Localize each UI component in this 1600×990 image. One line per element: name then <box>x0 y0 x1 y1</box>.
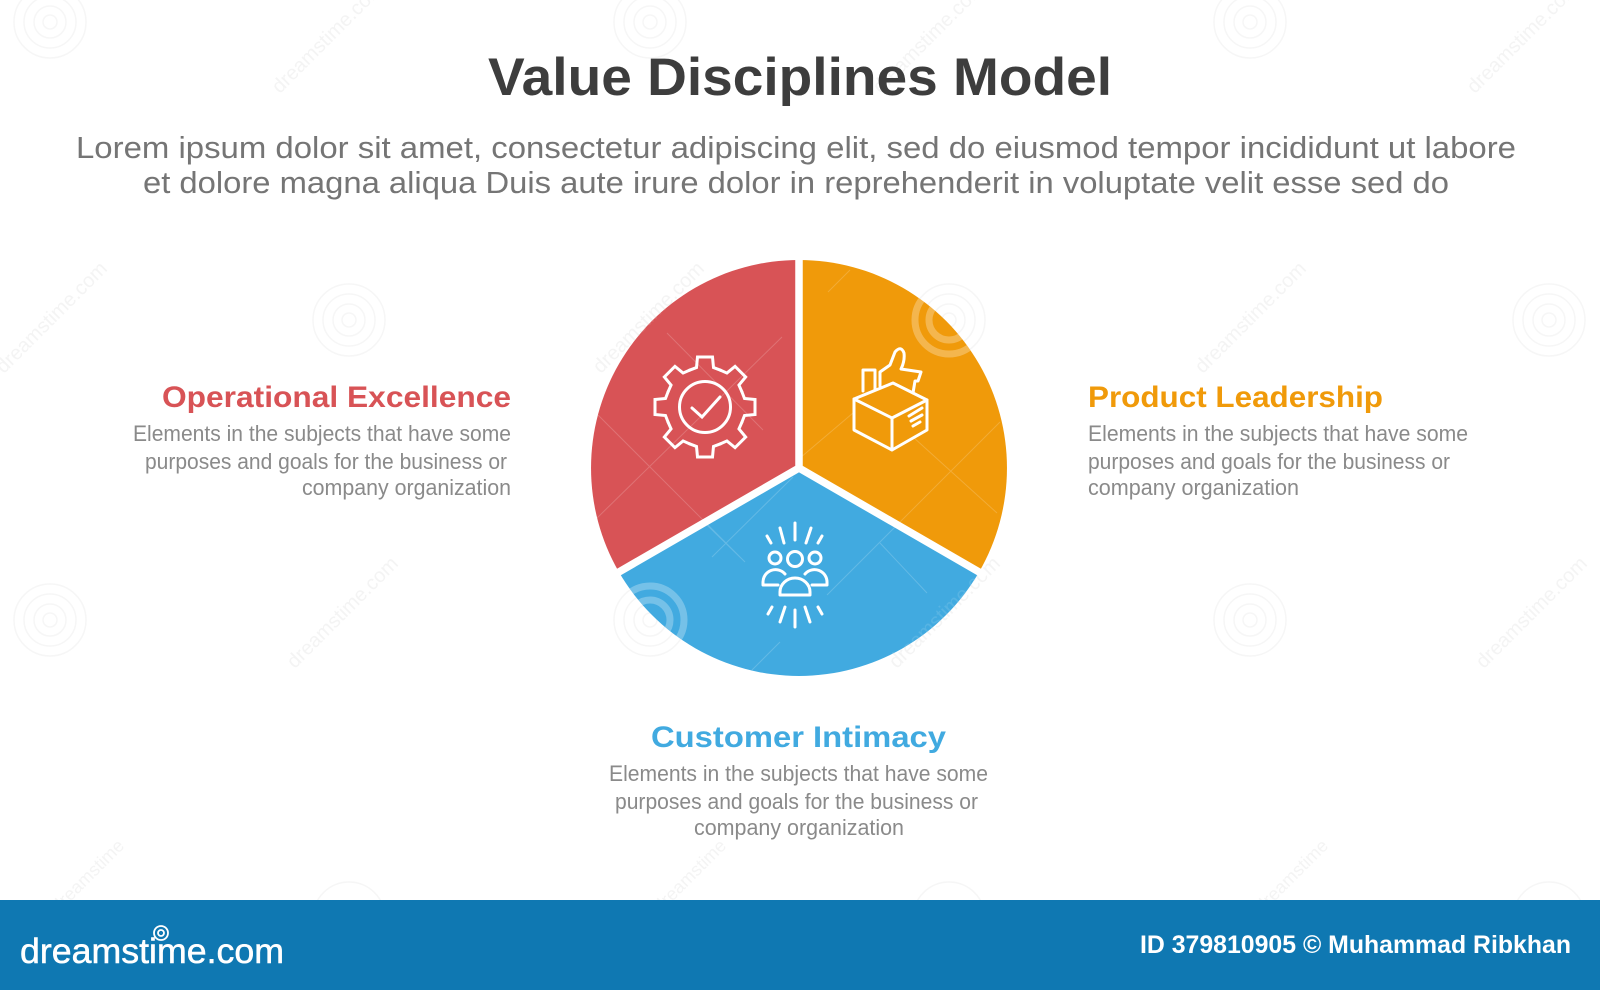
pie chart: three value disciplines: dreamstime.com <box>589 258 709 378</box>
heading: customer intimacy: Customer Intimacy <box>651 721 946 754</box>
pie chart: three value disciplines: dreamstime.com <box>885 553 1005 673</box>
text: dreamstime.com <box>1191 258 1311 378</box>
title: Value Disciplines Model <box>488 48 1112 107</box>
text: dreamstime.com <box>589 258 709 378</box>
description: product leadership: Elements in the subjects that have some <box>1088 421 1468 446</box>
text: dreamstime.com <box>885 553 1005 673</box>
text: dreamstime <box>649 835 730 916</box>
description: product leadership: purposes and goals for the business or <box>1088 449 1450 474</box>
description: operational excellence: Elements in the subjects that have some <box>133 421 511 446</box>
description: operational excellence: purposes and goals for the business or <box>145 449 507 474</box>
text: dreamstime <box>1251 835 1332 916</box>
subtitle text block <box>76 130 1516 200</box>
description: customer intimacy <box>609 761 988 840</box>
footer bar <box>0 900 1600 990</box>
description: product leadership: company organization <box>1088 475 1299 500</box>
icon: gear with check mark <box>655 357 755 457</box>
description: product leadership <box>1088 421 1468 500</box>
description: customer intimacy: company organization <box>694 815 904 840</box>
slice: product leadership (orange) <box>799 260 1007 572</box>
description: operational excellence <box>133 421 511 500</box>
text: dreamstime.com <box>283 553 403 673</box>
subtitle text block: Lorem ipsum dolor sit amet, consectetur adipiscing elit, sed do eiusmod tempor incididunt ut labore <box>76 130 1516 165</box>
subtitle text block: et dolore magna aliqua Duis aute irure dolor in reprehenderit in voluptate velit esse sed do <box>143 165 1449 200</box>
footer logo: dreamstime.com: dreamstime.com <box>20 932 284 971</box>
text: dreamstime.com <box>1472 553 1592 673</box>
heading: operational excellence: Operational Excellence <box>162 381 511 414</box>
slice: operational excellence (red) <box>591 260 799 572</box>
text: dreamstime <box>47 835 128 916</box>
description: customer intimacy: purposes and goals for the business or <box>615 789 978 814</box>
footer credit: ID 379810905 © Muhammad Ribkhan <box>1140 931 1571 959</box>
text block: customer intimacy <box>609 721 988 840</box>
slice: customer intimacy (blue) <box>619 468 979 676</box>
text block: operational excellence <box>133 381 511 500</box>
icon: group of people with rays <box>763 523 827 627</box>
text block: product leadership <box>1088 381 1468 500</box>
pie chart: three value disciplines <box>589 250 1007 676</box>
description: operational excellence: company organization <box>302 475 511 500</box>
description: customer intimacy: Elements in the subjects that have some <box>609 761 988 786</box>
heading: product leadership: Product Leadership <box>1088 381 1383 414</box>
icon: box with thumbs up <box>854 349 927 450</box>
